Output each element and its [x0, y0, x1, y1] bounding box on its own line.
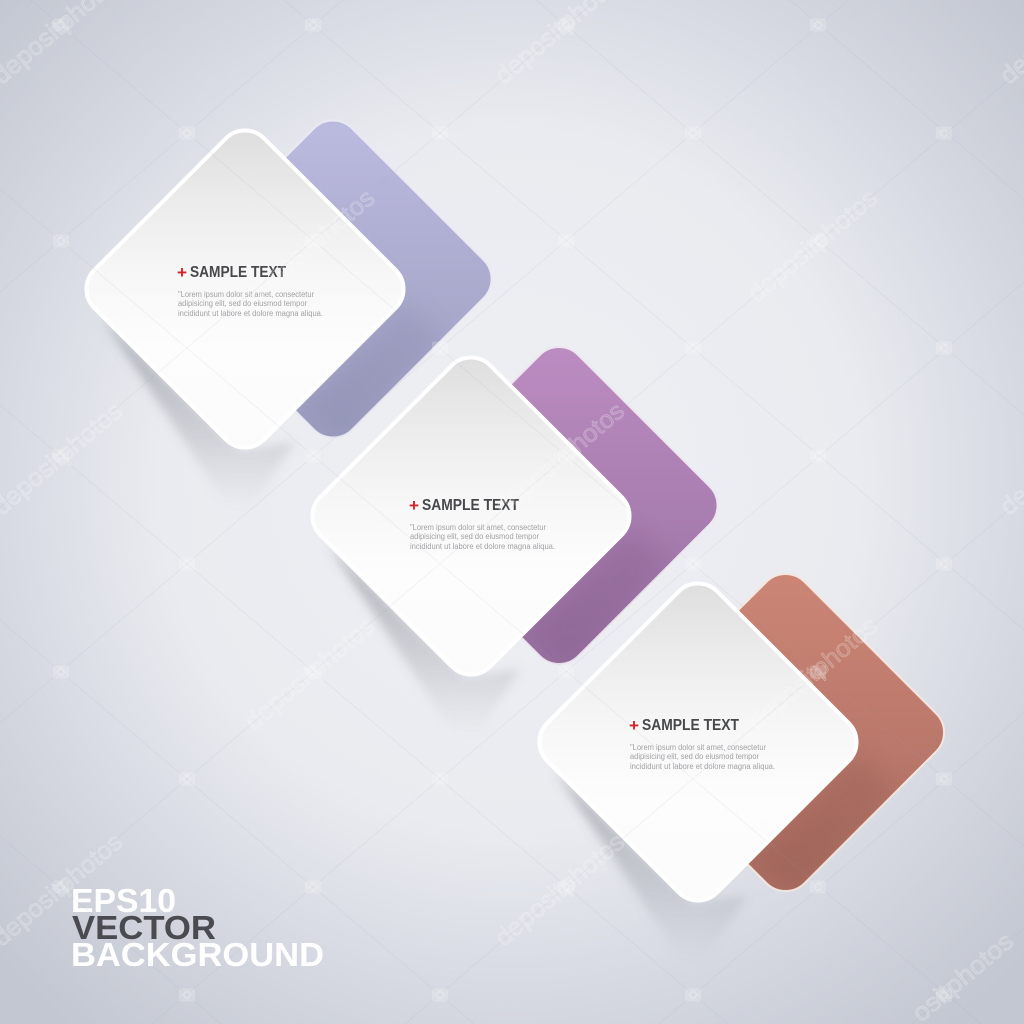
footer title: VECTOR — [72, 909, 216, 946]
step 1 body text: "Lorem ipsum dolor sit amet, consectetur — [178, 290, 314, 299]
panel: step 2 — [310, 348, 717, 712]
panel: step 1 — [84, 120, 490, 486]
step 2 body text: incididunt ut labore et dolore magna aliqua. — [410, 542, 555, 551]
white front card — [75, 119, 415, 459]
footer title: BACKGROUND — [71, 936, 324, 973]
ground shadow — [555, 771, 748, 963]
ground shadow — [102, 318, 295, 510]
shadow on back card — [324, 318, 433, 437]
step 2 heading: + — [409, 496, 419, 515]
purple-blue back card — [163, 109, 503, 449]
step 1 body text: adipisicing elit, sed do eiusmod tempor — [178, 299, 307, 308]
step 2 body text — [410, 523, 555, 551]
step 3 body text: "Lorem ipsum dolor sit amet, consectetur — [630, 743, 766, 752]
step 3 body text: incididunt ut labore et dolore magna aliqua. — [630, 762, 775, 771]
panel: step 3 — [538, 573, 945, 934]
step 1 heading: SAMPLE TEXT — [190, 264, 286, 281]
step 3 body text — [630, 743, 775, 771]
watermark overlay: depositphotos — [240, 184, 380, 308]
shadow on back card — [768, 766, 894, 890]
white front card — [301, 346, 641, 686]
step 2 heading: SAMPLE TEXT — [422, 497, 519, 514]
step 2 body text: adipisicing elit, sed do eiusmod tempor — [410, 532, 539, 541]
step 3 body text: adipisicing elit, sed do eiusmod tempor — [630, 752, 759, 761]
ground shadow — [328, 545, 521, 737]
watermark overlay: depositphotos — [490, 828, 630, 952]
footer title: EPS10 — [71, 882, 176, 919]
step 3 heading: + — [629, 716, 639, 735]
step 2 body text: "Lorem ipsum dolor sit amet, consectetur — [410, 523, 546, 532]
footer title — [71, 882, 324, 973]
watermark overlay: depositphotos — [743, 612, 883, 736]
shadow on back card — [544, 540, 666, 664]
watermark overlay: depositphotos — [490, 397, 630, 521]
watermark overlay: depositphotos — [240, 612, 380, 736]
white front card — [528, 572, 868, 912]
step 1 body text — [178, 290, 323, 318]
terracotta back card — [616, 563, 955, 902]
violet back card — [389, 336, 729, 675]
step 1 body text: incididunt ut labore et dolore magna aliqua. — [178, 309, 323, 318]
step 3 heading: SAMPLE TEXT — [642, 717, 739, 734]
step 1 heading: + — [177, 263, 187, 282]
watermark overlay: depositphotos — [743, 184, 883, 308]
